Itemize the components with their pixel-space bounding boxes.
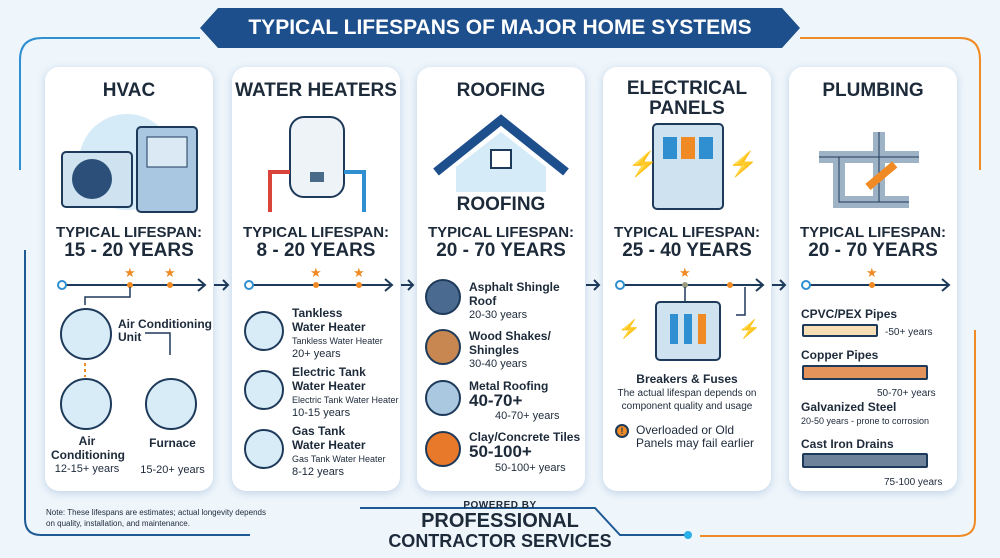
panel: Water Heaters: Water Heater — [292, 379, 366, 393]
panel: Water Heaters: Electric Tank — [292, 365, 366, 379]
timeline: ★ — [353, 265, 365, 280]
panel: Electrical Panels: Breakers & Fuses — [636, 372, 738, 386]
panel: Electrical Panels: Panels may fail earlier — [636, 436, 754, 450]
panel: Roofing: Clay/Concrete Tiles — [469, 430, 580, 444]
panel: HVAC: Air Conditioning — [118, 317, 212, 331]
icon: electrical panel: ⚡ — [628, 150, 658, 178]
icon: house roof — [433, 114, 569, 192]
panel: Plumbing: Cast Iron Drains — [801, 437, 894, 451]
timeline: ★ — [124, 265, 136, 280]
note: Note: These lifespans are estimates; actual longevity depends — [46, 508, 266, 517]
panel: Electrical Panels: Overloaded or Old — [636, 423, 734, 437]
panel: Electrical Panels: PANELS — [649, 98, 725, 119]
timeline: ★ — [679, 265, 691, 280]
panel: Plumbing: CPVC/PEX Pipes — [801, 307, 897, 321]
panel: Roofing — [417, 67, 585, 491]
panel: Roofing: TYPICAL LIFESPAN: — [428, 224, 574, 241]
note: on quality, installation, and maintenance. — [46, 519, 190, 528]
panel: Roofing: 40-70+ years — [495, 410, 560, 422]
timeline — [57, 265, 206, 292]
note — [46, 508, 266, 528]
timeline — [801, 265, 950, 292]
panel: HVAC: 15-20+ years — [140, 464, 205, 476]
panel: Plumbing: TYPICAL LIFESPAN: — [800, 224, 946, 241]
panel: HVAC: Furnace — [149, 436, 196, 450]
panel: Electrical Panels: TYPICAL LIFESPAN: — [614, 224, 760, 241]
footer brand: PROFESSIONAL — [421, 510, 579, 532]
panel: HVAC: Unit — [118, 330, 141, 344]
panel: Roofing: 30-40 years — [469, 358, 527, 370]
panel: Electrical Panels: ! — [620, 426, 624, 436]
panel: Plumbing: Copper Pipes — [801, 348, 878, 362]
panel: Electrical Panels — [603, 67, 771, 491]
panel: Water Heaters: Tankless Water Heater — [292, 336, 383, 346]
footer brand: POWERED BY — [463, 500, 537, 511]
panel: Roofing: 50-100+ — [469, 442, 532, 461]
icon: hvac units — [61, 114, 198, 213]
panel: HVAC — [45, 67, 213, 491]
panel: Roofing: ROOFING — [457, 80, 545, 101]
panel: HVAC: 12-15+ years — [55, 463, 119, 475]
panel: Roofing: 40-70+ — [469, 391, 522, 410]
title banner: TYPICAL LIFESPANS OF MAJOR HOME SYSTEMS — [248, 16, 752, 39]
timeline: ★ — [310, 265, 322, 280]
panel: Plumbing: 75-100 years — [884, 477, 942, 488]
title banner — [200, 8, 800, 48]
panel: Water Heaters: 8 - 20 YEARS — [256, 240, 375, 261]
footer brand — [388, 500, 612, 551]
panel: Roofing: Shingles — [469, 343, 519, 357]
panel: Plumbing: 20 - 70 YEARS — [808, 240, 938, 261]
panel: Electrical Panels: 25 - 40 YEARS — [622, 240, 752, 261]
icon: electrical panel — [628, 123, 753, 210]
panel: HVAC: TYPICAL LIFESPAN: — [56, 224, 202, 241]
panel: Water Heaters: 8-12 years — [292, 466, 344, 478]
panel: Water Heaters: Water Heater — [292, 320, 366, 334]
panel: HVAC: HVAC — [103, 80, 155, 101]
panel: Plumbing: 50-70+ years — [877, 388, 936, 399]
icon: pipes — [819, 132, 919, 208]
panel: Electrical Panels: component quality and usage — [622, 401, 752, 412]
panel: Roofing: 50-100+ years — [495, 462, 566, 474]
panel: Water Heaters: Gas Tank — [292, 424, 345, 438]
panel: Electrical Panels: The actual lifespan depends on — [618, 388, 756, 399]
panel: Water Heaters: WATER HEATERS — [235, 80, 397, 101]
panel: Water Heaters: Gas Tank Water Heater — [292, 454, 386, 464]
panel: HVAC: Air Conditioning — [51, 434, 125, 462]
timeline — [244, 265, 394, 292]
panel: Plumbing: PLUMBING — [822, 80, 924, 101]
panel: Electrical Panels: ELECTRICAL — [627, 78, 747, 99]
icon: breaker box: ⚡ — [618, 318, 640, 340]
arrows between panels — [214, 279, 786, 291]
panel: Plumbing: Galvanized Steel — [801, 400, 896, 414]
panel: Water Heaters: Tankless — [292, 306, 342, 320]
panel: Roofing: Wood Shakes/ — [469, 329, 551, 343]
connectors — [84, 287, 171, 377]
icon: water heater — [268, 116, 366, 212]
panel: Water Heaters: 10-15 years — [292, 407, 350, 419]
timeline — [615, 265, 764, 292]
timeline: ★ — [164, 265, 176, 280]
footer brand: CONTRACTOR SERVICES — [388, 531, 612, 551]
timeline: ★ — [866, 265, 878, 280]
panel: Roofing: Asphalt Shingle — [469, 280, 560, 294]
panel: HVAC: 15 - 20 YEARS — [64, 240, 194, 261]
panel: Roofing: Metal Roofing — [469, 379, 548, 393]
panel: Water Heaters: Water Heater — [292, 438, 366, 452]
panel: Roofing: 20 - 70 YEARS — [436, 240, 566, 261]
panel: Roofing: ROOFING — [457, 194, 545, 215]
panel: Water Heaters — [232, 67, 400, 491]
panel: Roofing: Roof — [469, 294, 496, 308]
panel: Water Heaters: Electric Tank Water Heater — [292, 395, 399, 405]
panel: Plumbing: -50+ years — [885, 327, 933, 338]
panel: Plumbing — [789, 67, 957, 491]
panel: Roofing: 20-30 years — [469, 309, 527, 321]
panel: Water Heaters: TYPICAL LIFESPAN: — [243, 224, 389, 241]
panel: Water Heaters: 20+ years — [292, 348, 341, 360]
icon: breaker box — [618, 287, 758, 361]
panel: Plumbing: 20-50 years - prone to corrosion — [801, 416, 929, 426]
